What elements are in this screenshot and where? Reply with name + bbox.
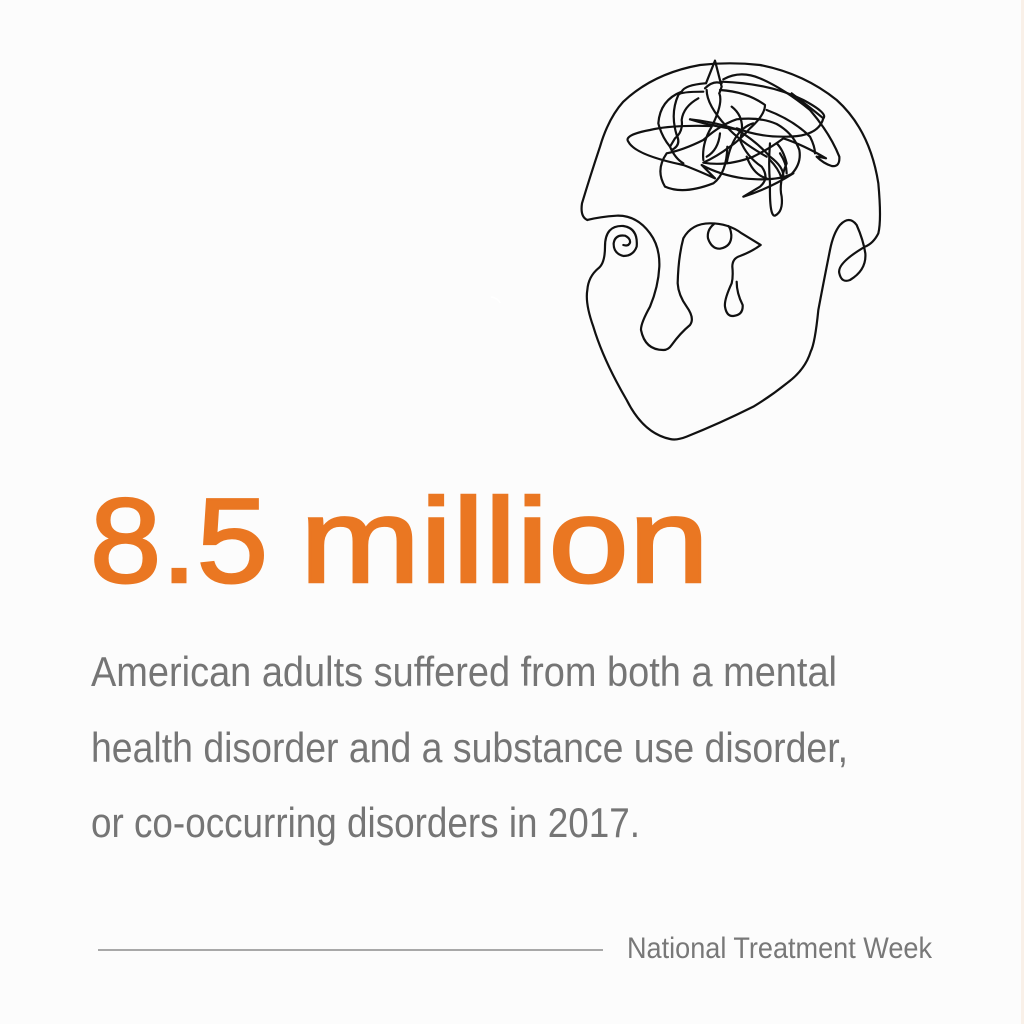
eye [708,224,731,249]
headline number: 8.5 [90,474,268,608]
body line 2: health disorder and a substance use disorder, [91,724,848,771]
head outline from forehead to chin and ear [582,63,880,439]
body text [91,648,848,846]
headline statistic [90,474,709,608]
faint white mark [491,297,500,303]
footer source label: National Treatment Week [627,932,933,965]
icon: line-drawn head with tangled thoughts [582,61,880,439]
body line 3: or co-occurring disorders in 2017. [91,799,640,846]
body line 1: American adults suffered from both a mental [91,648,837,695]
nose, cheek and tear line [587,216,761,350]
scribble of tangled thoughts [628,61,839,216]
footer rule [98,949,603,951]
headline unit: million [300,474,709,608]
